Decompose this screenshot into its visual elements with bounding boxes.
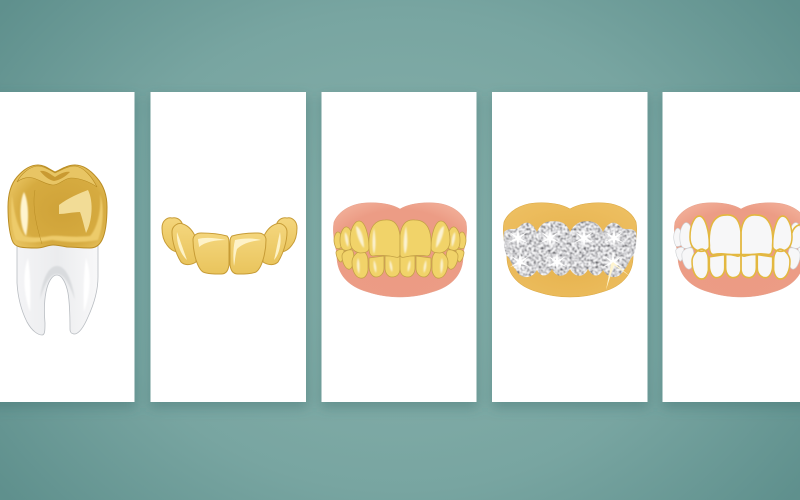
flare (606, 262, 631, 290)
far right gold tooth outline (792, 224, 800, 233)
icon: gold crown (8, 165, 107, 248)
gold tooth outlines (690, 215, 792, 279)
icon: yellow teeth (334, 220, 466, 278)
icon: gold base (503, 203, 637, 297)
diamond sparkles (508, 227, 624, 272)
panel 2: gold veneer bridge (150, 92, 306, 402)
panel 4: diamond teeth on gold (492, 92, 648, 402)
panel shadows (0, 96, 800, 408)
panel 3: full gold teeth (322, 92, 476, 402)
icon: gold bridge teeth (162, 218, 297, 274)
icon: diamond band (504, 221, 636, 290)
icon: gums (333, 203, 467, 297)
panel 1: gold crown on molar (0, 92, 134, 402)
icon: gums (674, 203, 800, 297)
bridge highlights (177, 232, 281, 266)
icon: tooth root (17, 244, 98, 335)
icon: white teeth (674, 215, 800, 279)
diamond glows (513, 232, 619, 267)
panel 5: white teeth with gold outline (662, 92, 800, 402)
